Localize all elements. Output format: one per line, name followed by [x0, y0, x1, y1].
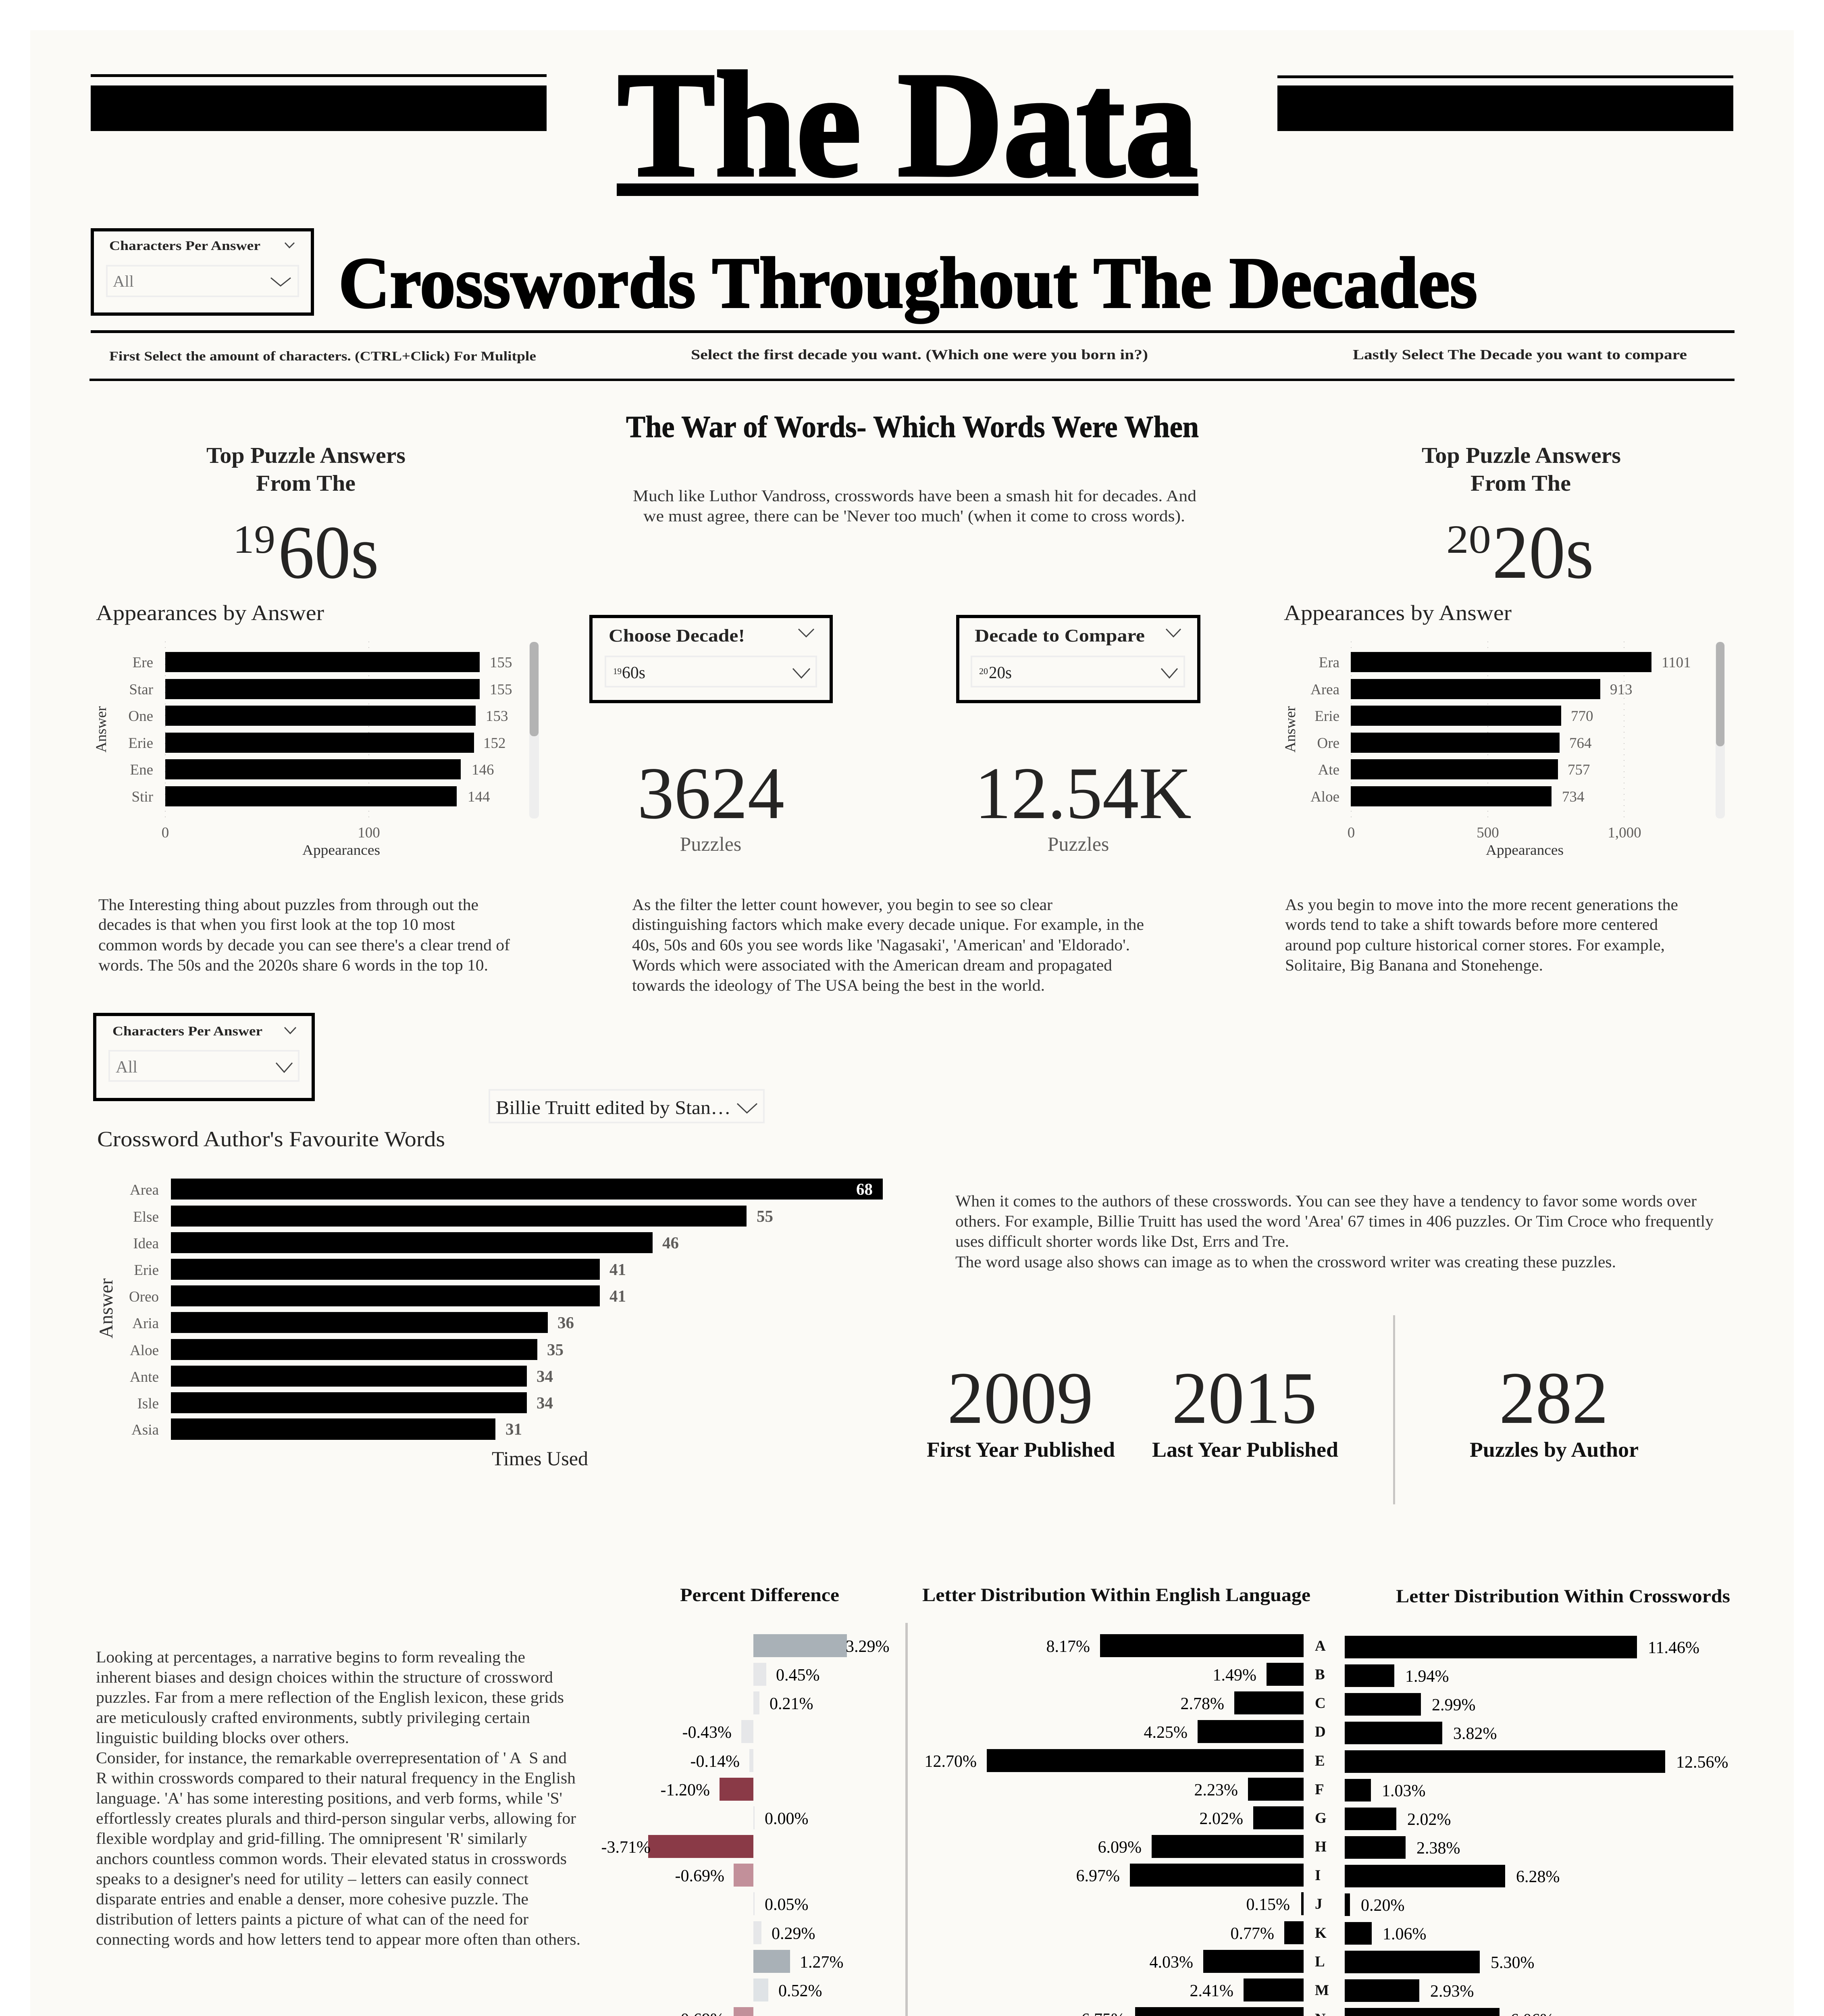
chart: crossword author's favourite words: Ante: [130, 1369, 159, 1385]
letter axis labels: G: [1315, 1810, 1327, 1826]
chart: appearances by answer 1960s: 144: [468, 789, 490, 805]
filter: characters per answer (top): [92, 230, 312, 314]
left heading: top puzzle answers 1960s: 19: [233, 517, 275, 562]
chart: appearances by answer 1960s: Answer: [93, 706, 110, 753]
chart: appearances by answer 1960s: One: [128, 708, 153, 725]
instruction strip: Select the first decade you want. (Which one were you born in?): [691, 347, 1148, 362]
stat: 12.54K puzzles: 12.54K: [975, 752, 1192, 834]
chart: crossword author's favourite words: 34: [537, 1393, 553, 1412]
text block: percentages narrative: puzzles. Far from a mere reflection of the English lexicon, these grids: [96, 1688, 564, 1706]
chart: letter distribution within English language: 6.97%: [1076, 1867, 1120, 1885]
chart: appearances by answer 1960s: 153: [486, 708, 508, 725]
chart: percent difference: Percent Difference: [680, 1585, 839, 1606]
chart: letter distribution within English language: 2.23%: [1194, 1781, 1238, 1799]
text block: right commentary: [1285, 896, 1678, 974]
text block: middle commentary: towards the ideology of The USA being the best in the world.: [632, 976, 1045, 994]
chart: letter distribution within crosswords: 11.46%: [1648, 1639, 1699, 1657]
chart: letter distribution within crosswords: 1.06%: [1383, 1925, 1426, 1943]
chart: letter distribution within English language: 12.70%: [925, 1752, 977, 1771]
chart: letter distribution within English language: 0.15%: [1246, 1895, 1290, 1914]
chart: appearances by answer 2020s: 757: [1568, 762, 1590, 778]
letter axis labels: M: [1315, 1982, 1329, 1999]
chart: percent difference: -0.43%: [682, 1723, 732, 1742]
right heading: top puzzle answers 2020s: [1422, 443, 1621, 594]
chart: crossword author's favourite words: 35: [547, 1340, 564, 1359]
left heading: top puzzle answers 1960s: Top Puzzle Answers: [206, 443, 406, 468]
text block: percentages narrative: anchors countless common words. Their elevated status in crosswords: [96, 1849, 567, 1868]
chart: appearances by answer 2020s: 770: [1571, 708, 1593, 725]
chart: letter distribution within English language: Letter Distribution Within English Language: [922, 1585, 1310, 1606]
chart: appearances by answer 1960s: Ere: [133, 654, 153, 671]
chart: letter distribution within crosswords: 1.03%: [1382, 1782, 1425, 1800]
filter: decade to compare: 20: [979, 666, 988, 676]
chart: percent difference: 0.29%: [772, 1924, 815, 1943]
chart: letter distribution within English language: 4.25%: [1144, 1723, 1188, 1742]
text block: left commentary: The Interesting thing about puzzles from through out the: [98, 896, 478, 914]
letter axis labels: H: [1315, 1839, 1327, 1855]
intro text: [633, 487, 1196, 525]
letter axis labels: I: [1315, 1867, 1321, 1884]
chart: letter distribution within crosswords: 12.56%: [1676, 1753, 1728, 1772]
chart: crossword author's favourite words: Else: [133, 1209, 159, 1225]
chart: crossword author's favourite words: Area: [130, 1182, 159, 1198]
letter axis labels: A: [1315, 1638, 1326, 1654]
right heading: top puzzle answers 2020s: Top Puzzle Answers: [1422, 443, 1621, 468]
chart: appearances by answer 1960s: Star: [129, 681, 153, 698]
letter axis labels: K: [1315, 1925, 1327, 1941]
stat: 3624 puzzles: Puzzles: [680, 833, 741, 855]
chart: letter distribution within crosswords: 2.02%: [1407, 1810, 1451, 1829]
chart: appearances by answer 2020s: 1,000: [1608, 825, 1641, 841]
chart: percent difference: 3.29%: [846, 1637, 889, 1656]
text block: middle commentary: 40s, 50s and 60s you see words like 'Nagasaki', 'American' and 'Eldorado'.: [632, 936, 1130, 954]
chart: appearances by answer 1960s: [93, 601, 539, 858]
filter: characters per answer (top): All: [113, 272, 134, 290]
letter axis labels: B: [1315, 1666, 1325, 1683]
text block: authors commentary: When it comes to the authors of these crosswords. You can see they have a tendency to favor some words over: [955, 1192, 1697, 1210]
chart: appearances by answer 2020s: [1282, 601, 1725, 858]
stat: first year published: First Year Published: [927, 1438, 1115, 1462]
title: The Data: The Data: [618, 42, 1198, 208]
chart: crossword author's favourite words: 55: [757, 1207, 773, 1225]
chart: crossword author's favourite words: Asia: [131, 1422, 159, 1438]
chart: letter distribution within crosswords: 3.82%: [1453, 1724, 1497, 1743]
instruction strip: [89, 330, 1735, 381]
chart: letter distribution within English language: 2.78%: [1180, 1695, 1224, 1713]
chart: appearances by answer 2020s: Erie: [1314, 708, 1339, 725]
text block: percentages narrative: Consider, for instance, the remarkable overrepresentation of ' A S and: [96, 1749, 567, 1767]
chart: letter distribution within crosswords: 0.20%: [1361, 1896, 1404, 1915]
chart: appearances by answer 2020s: Area: [1310, 681, 1339, 698]
letter axis labels: C: [1315, 1695, 1326, 1712]
subtitle: Crosswords Throughout The Decades: Crosswords Throughout The Decades: [339, 243, 1477, 323]
chart: percent difference: 0.00%: [765, 1810, 809, 1828]
chart: percent difference: 0.52%: [778, 1982, 822, 2000]
filter: characters per answer (authors): [95, 1014, 313, 1100]
text block: left commentary: common words by decade you can see there's a clear trend of: [98, 936, 510, 954]
text block: percentages narrative: Looking at percentages, a narrative begins to form revealing the: [96, 1648, 525, 1666]
stat: first year published: [927, 1357, 1115, 1462]
left heading: top puzzle answers 1960s: [206, 443, 406, 594]
text block: right commentary: words tend to take a shift towards before more centered: [1285, 915, 1658, 933]
text block: percentages narrative: effortlessly creates plurals and third-person singular verbs, allowing for: [96, 1809, 576, 1827]
filter: characters per answer (top): Characters Per Answer: [109, 239, 260, 253]
text block: percentages narrative: language. 'A' has some interesting positions, and verb forms, while 'S': [96, 1789, 562, 1807]
chart: crossword author's favourite words: 46: [662, 1233, 679, 1252]
right heading: top puzzle answers 2020s: 20: [1446, 517, 1491, 562]
filter: decade to compare: [958, 616, 1199, 702]
stat: first year published: 2009: [947, 1357, 1093, 1439]
text block: right commentary: As you begin to move into the more recent generations the: [1285, 896, 1678, 914]
stat: last year published: Last Year Published: [1152, 1438, 1338, 1462]
chart: letter distribution within English language: 2.02%: [1200, 1810, 1243, 1828]
stat: 3624 puzzles: 3624: [637, 752, 784, 834]
intro text: Much like Luthor Vandross, crosswords have been a smash hit for decades. And: [633, 487, 1196, 505]
chart: crossword author's favourite words: 41: [609, 1260, 626, 1279]
chart: appearances by answer 2020s: Appearances: [1486, 842, 1564, 858]
chart: percent difference: -0.14%: [690, 1752, 740, 1771]
chart: letter distribution within English language: 1.49%: [1213, 1666, 1256, 1685]
filter: choose decade: [591, 616, 831, 702]
letter axis labels: [1315, 1638, 1330, 2016]
chart: appearances by answer 2020s: 913: [1610, 681, 1633, 698]
stat: last year published: 2015: [1172, 1357, 1317, 1439]
filter: characters per answer (authors): All: [116, 1058, 137, 1077]
chart: appearances by answer 1960s: Ene: [130, 762, 153, 778]
letter axis labels: L: [1315, 1954, 1325, 1970]
right heading: top puzzle answers 2020s: From The: [1470, 471, 1571, 496]
chart: appearances by answer 2020s: Appearances by Answer: [1284, 601, 1512, 625]
chart: letter distribution within crosswords: 2.93%: [1430, 1982, 1474, 2001]
chart: appearances by answer 2020s: Era: [1319, 654, 1339, 671]
chart: appearances by answer 2020s: 734: [1562, 789, 1584, 805]
stat: puzzles by author: Puzzles by Author: [1470, 1438, 1639, 1462]
chart: appearances by answer 1960s: 146: [472, 762, 494, 778]
text block: percentages narrative: speaks to a designer's need for utility – letters can easily connect: [96, 1870, 528, 1888]
chart: appearances by answer 1960s: 100: [358, 825, 380, 841]
chart: letter distribution within English language: 2.41%: [1190, 1982, 1233, 2000]
chart: crossword author's favourite words: Aloe: [130, 1342, 159, 1359]
text block: percentages narrative: flexible wordplay and grid-filling. The omnipresent 'R' similarly: [96, 1829, 527, 1847]
filter: characters per answer (authors): Characters Per Answer: [112, 1024, 262, 1039]
text block: percentages narrative: [96, 1648, 580, 1948]
filter: choose decade: Choose Decade!: [609, 626, 745, 646]
chart: crossword author's favourite words: Erie: [134, 1262, 159, 1279]
letter axis labels: F: [1315, 1781, 1324, 1798]
chart: letter distribution within crosswords: 1.94%: [1405, 1667, 1449, 1686]
left heading: top puzzle answers 1960s: From The: [256, 471, 356, 496]
chart: appearances by answer 1960s: 155: [490, 654, 512, 671]
header right bars: [1277, 75, 1733, 131]
text block: percentages narrative: disparate entries and enable a denser, more cohesive puzzle. The: [96, 1890, 528, 1908]
right heading: top puzzle answers 2020s: 20s: [1492, 510, 1594, 594]
chart: percent difference: 1.27%: [800, 1953, 843, 1972]
chart: percent difference: -0.69%: [675, 1867, 724, 1885]
chart: crossword author's favourite words: Aria: [132, 1315, 159, 1332]
chart: appearances by answer 1960s: 155: [490, 681, 512, 698]
text block: authors commentary: The word usage also shows can image as to when the crossword writer was creating these puzzles.: [955, 1253, 1616, 1271]
filter: choose decade: 19: [613, 666, 622, 676]
chart: letter distribution within crosswords: 2.99%: [1432, 1696, 1475, 1714]
text block: middle commentary: distinguishing factors which make every decade unique. For example, in the: [632, 915, 1144, 933]
chart: letter distribution within crosswords: [1345, 1586, 1730, 2016]
instruction strip: Lastly Select The Decade you want to compare: [1353, 347, 1687, 362]
text block: right commentary: Solitaire, Big Banana and Stonehenge.: [1285, 956, 1543, 974]
filter: choose decade: 60s: [622, 664, 645, 682]
letter axis labels: J: [1315, 1896, 1322, 1912]
chart: crossword author's favourite words: 36: [557, 1313, 574, 1332]
text block: middle commentary: [632, 896, 1144, 994]
chart: letter distribution within crosswords: 2.38%: [1416, 1839, 1460, 1858]
chart: crossword author's favourite words: Crossword Author's Favourite Words: [97, 1127, 445, 1151]
chart: percent difference: 0.21%: [770, 1695, 813, 1713]
filter: author select: Billie Truitt edited by Stan…: [496, 1097, 731, 1118]
left heading: top puzzle answers 1960s: 60s: [278, 510, 379, 594]
chart: letter distribution within crosswords: 5.30%: [1491, 1954, 1534, 1972]
header left bars: [91, 74, 547, 131]
filter: decade to compare: Decade to Compare: [975, 626, 1145, 646]
text block: right commentary: around pop culture historical corner stores. For example,: [1285, 936, 1665, 954]
chart: appearances by answer 1960s: Stir: [132, 789, 153, 805]
text block: percentages narrative: R within crosswords compared to their natural frequency in the English: [96, 1769, 576, 1787]
chart: crossword author's favourite words: 68: [856, 1180, 873, 1198]
text block: left commentary: decades is that when you first look at the top 10 most: [98, 915, 455, 933]
chart: crossword author's favourite words: Idea: [133, 1235, 159, 1252]
chart: letter distribution within English language: 4.03%: [1150, 1953, 1193, 1972]
chart: appearances by answer 2020s: 0: [1348, 825, 1355, 841]
chart: appearances by answer 2020s: 500: [1477, 825, 1499, 841]
text block: authors commentary: others. For example, Billie Truitt has used the word 'Area' 67 times in 406 puzzles. Or Tim Croce who frequently: [955, 1212, 1714, 1230]
stat: last year published: [1152, 1357, 1338, 1462]
stat: 12.54K puzzles: Puzzles: [1048, 833, 1109, 855]
instruction strip: First Select the amount of characters. (CTRL+Click) For Mulitple: [109, 349, 536, 364]
chart: appearances by answer 2020s: 1101: [1662, 654, 1691, 671]
heading: The War of Words: The War of Words- Which Words Were When: [626, 410, 1199, 444]
chart: percent difference: [601, 1585, 889, 2016]
stat: puzzles by author: 282: [1499, 1357, 1608, 1439]
chart: letter distribution within crosswords: Letter Distribution Within Crosswords: [1396, 1586, 1730, 1607]
filter: author select: [489, 1090, 764, 1123]
chart: crossword author's favourite words: 31: [505, 1420, 522, 1438]
chart: crossword author's favourite words: [96, 1127, 883, 1470]
text block: percentages narrative: are meticulously crafted environments, subtly privileging certain: [96, 1708, 530, 1727]
chart: letter distribution within crosswords: 6.28%: [1516, 1868, 1560, 1886]
chart: appearances by answer 1960s: 152: [483, 735, 505, 752]
text block: middle commentary: As the filter the letter count however, you begin to see so clear: [632, 896, 1052, 914]
letter axis labels: D: [1315, 1724, 1326, 1740]
filter: decade to compare: 20s: [989, 664, 1012, 682]
text block: percentages narrative: inherent biases and design choices within the structure of crossword: [96, 1668, 553, 1686]
chart: appearances by answer 2020s: Ore: [1317, 735, 1339, 752]
chart: percent difference: 0.45%: [776, 1666, 820, 1685]
text block: percentages narrative: distribution of letters paints a picture of what can of the need for: [96, 1910, 528, 1928]
text block: percentages narrative: linguistic building blocks over others.: [96, 1729, 349, 1747]
chart: appearances by answer 1960s: Appearances by Answer: [96, 601, 324, 625]
chart: appearances by answer 1960s: Appearances: [302, 842, 380, 858]
text block: middle commentary: Words which were associated with the American dream and propagated: [632, 956, 1112, 974]
chart: appearances by answer 2020s: 764: [1569, 735, 1591, 752]
chart: percent difference: -3.71%: [601, 1838, 651, 1857]
text block: authors commentary: [955, 1192, 1714, 1271]
chart: percent difference: -1.20%: [661, 1781, 710, 1799]
chart: letter distribution within English language: [922, 1585, 1310, 2016]
letter axis labels: E: [1315, 1753, 1325, 1769]
chart: appearances by answer 1960s: 0: [162, 825, 169, 841]
chart: appearances by answer 2020s: Ate: [1318, 762, 1339, 778]
chart: letter distribution within English language: 8.17%: [1046, 1637, 1090, 1656]
chart: crossword author's favourite words: Answer: [96, 1278, 117, 1339]
chart: appearances by answer 1960s: Erie: [128, 735, 153, 752]
chart: crossword author's favourite words: 34: [537, 1367, 553, 1385]
text block: percentages narrative: connecting words and how letters tend to appear more often than others.: [96, 1930, 580, 1948]
chart: appearances by answer 2020s: Aloe: [1310, 789, 1339, 805]
chart: crossword author's favourite words: Isle: [137, 1395, 159, 1412]
chart: letter distribution within English language: 6.09%: [1098, 1838, 1142, 1857]
intro text: we must agree, there can be 'Never too much' (when it come to cross words).: [643, 507, 1185, 525]
text block: left commentary: [98, 896, 510, 974]
chart: crossword author's favourite words: Oreo: [129, 1289, 159, 1305]
chart: percent difference: 0.05%: [765, 1895, 809, 1914]
text block: left commentary: words. The 50s and the 2020s share 6 words in the top 10.: [98, 956, 488, 974]
stat: puzzles by author: [1470, 1357, 1639, 1462]
chart: crossword author's favourite words: Times Used: [492, 1447, 588, 1470]
chart: letter distribution within English language: 0.77%: [1230, 1924, 1274, 1943]
text block: authors commentary: uses difficult shorter words like Dst, Errs and Tre.: [955, 1232, 1289, 1250]
chart: crossword author's favourite words: 41: [609, 1287, 626, 1305]
chart: appearances by answer 2020s: Answer: [1282, 706, 1299, 753]
